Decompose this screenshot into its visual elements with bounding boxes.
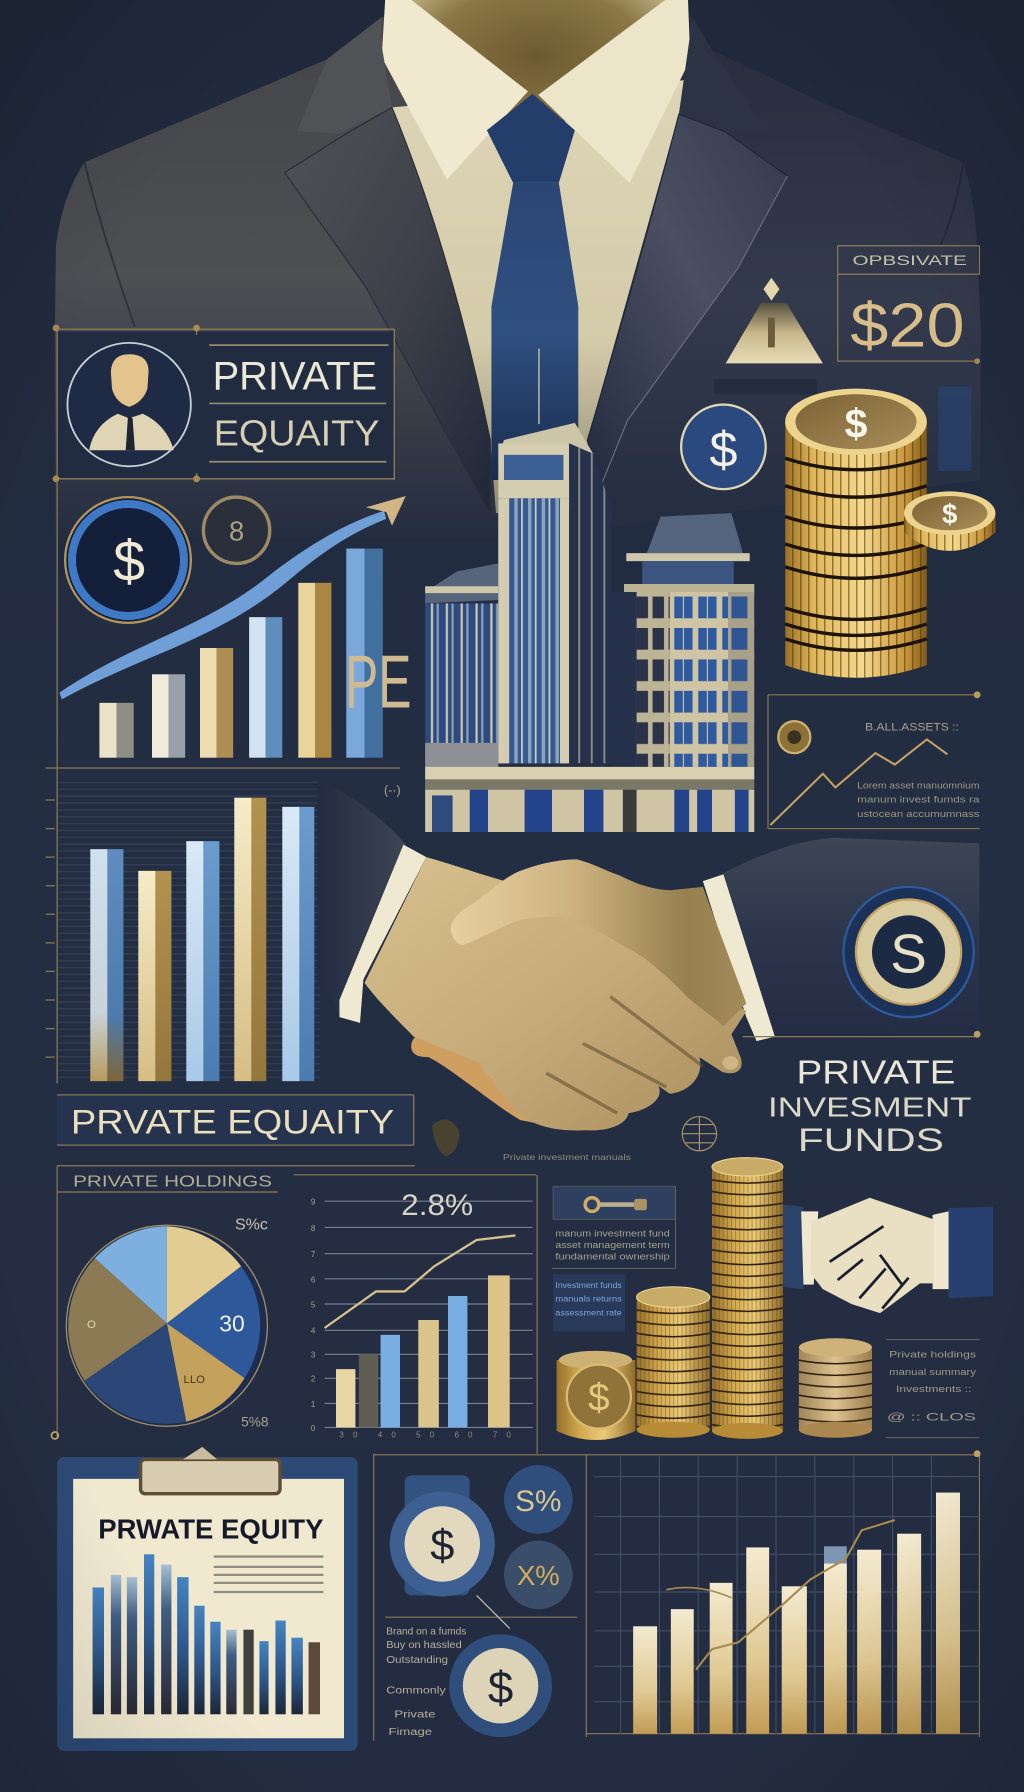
right sleeve — [723, 838, 979, 1041]
left sleeve — [318, 781, 406, 1017]
small mark: parentheses: (-·) — [384, 783, 401, 797]
panel: large bar chart — [46, 768, 320, 1083]
label: small heading: OPBSIVATE — [853, 253, 967, 268]
text rows — [555, 1229, 670, 1261]
text lines — [214, 1557, 323, 1592]
icon: blue dollar medallion: $ — [113, 530, 145, 594]
small caption: Private investment manuals — [503, 1153, 631, 1162]
label: lower wedge: LLO — [184, 1374, 205, 1386]
coin: dollar — [557, 1351, 635, 1440]
suit jacket right — [537, 17, 981, 537]
value: $20: $20 — [850, 291, 965, 360]
label: PE: PE — [345, 639, 411, 723]
icon: dollar dial — [449, 1634, 552, 1737]
icon: person in circle — [67, 343, 191, 466]
y axis labels — [311, 1198, 316, 1433]
line and bar chart: 2.8% — [294, 1175, 537, 1454]
icon: small handshake — [783, 1198, 993, 1313]
arrow: rising trend — [59, 496, 406, 699]
label: left wedge: O — [87, 1319, 96, 1331]
panel: large rising bar chart — [586, 1450, 981, 1737]
icon: triangle — [726, 278, 823, 363]
icon: blue document — [938, 386, 971, 471]
label: private holdings: PRIVATE HOLDINGS — [73, 1173, 272, 1190]
heading: private: PRIVATE — [213, 355, 377, 399]
icon: x badge: X% — [517, 1560, 560, 1591]
panel: private investment funds — [743, 1031, 981, 1158]
y axis labels: 6 — [311, 1275, 316, 1284]
notes: Commonly — [386, 1686, 447, 1697]
heading: equaity: EQUAITY — [214, 413, 379, 454]
bar chart: growth bars — [99, 549, 383, 758]
y axis labels: 8 — [311, 1224, 316, 1233]
icon: dollar circle — [681, 405, 766, 489]
bar chart — [93, 1554, 320, 1714]
panel: $20 value — [838, 246, 980, 364]
notes: ustocean accumumnass — [857, 809, 980, 819]
panel: private equity header — [53, 325, 394, 482]
label: small title: B.ALL.ASSETS :: — [865, 721, 959, 733]
thumbnail — [722, 1056, 738, 1070]
y axis labels: 9 — [311, 1198, 316, 1207]
bars — [336, 1275, 510, 1427]
label: 2.8%: 2.8% — [401, 1189, 473, 1222]
shirt collar — [382, 0, 690, 183]
lower thumb and fingertips — [411, 1031, 566, 1129]
text rows: manum investment fund — [555, 1229, 670, 1239]
label: bottom right: 5%8 — [241, 1414, 269, 1429]
panel: right side notes: manual summary — [889, 1367, 977, 1377]
icon: x badge — [504, 1541, 573, 1609]
heading line: private: PRIVATE — [797, 1054, 955, 1091]
left cuff — [339, 845, 426, 1023]
figure: suit and tie — [55, 0, 981, 537]
stack: short — [799, 1338, 872, 1438]
small ornament: coin pile — [432, 1119, 459, 1157]
coin: top — [785, 389, 927, 467]
icon: watch — [390, 1475, 495, 1597]
right cuff — [703, 874, 775, 1041]
icon: blue dollar medallion — [65, 497, 191, 623]
banner: private equity: PRVATE EQUAITY — [71, 1104, 394, 1142]
line chart — [770, 739, 947, 825]
panel: blue text rows — [553, 1274, 625, 1331]
coin stack: large — [785, 389, 995, 678]
notes: Buy on hassled — [386, 1640, 462, 1651]
icon: watch: $ — [430, 1522, 454, 1570]
coin: small — [904, 491, 995, 551]
stack: tall — [712, 1158, 783, 1439]
icon: small ring — [203, 497, 270, 563]
right lapel — [679, 17, 767, 131]
stack: medium — [637, 1287, 710, 1438]
panel: growth chart with arrow — [46, 480, 411, 768]
clip — [141, 1447, 280, 1494]
handshake — [318, 781, 979, 1130]
label: 30: 30 — [219, 1310, 245, 1336]
panel: line chart notes — [768, 691, 981, 829]
icon: percent badge: S% — [515, 1485, 561, 1518]
panel: right side notes: Investments :: — [896, 1384, 971, 1394]
panel: right side notes: Private holdings — [889, 1350, 977, 1360]
notes: Brand on a fumds — [386, 1626, 466, 1637]
pie chart — [66, 1217, 269, 1429]
panel: blue text rows: Investment funds — [555, 1281, 622, 1290]
label: top right: S%c — [235, 1217, 268, 1234]
left wing — [425, 563, 498, 768]
coin: small: $ — [942, 498, 957, 529]
y axis labels: 0 — [311, 1424, 316, 1433]
icon: small ring: 8 — [229, 516, 244, 547]
y axis labels: 7 — [311, 1250, 316, 1259]
notes — [857, 781, 981, 819]
finger creases — [546, 997, 703, 1113]
panel: clipboard report — [57, 1447, 358, 1751]
coin: top: $ — [845, 401, 868, 447]
icon: dollar circle: $ — [709, 420, 737, 477]
suit jacket left — [55, 17, 537, 537]
panel: right side notes — [886, 1339, 979, 1438]
main tower — [498, 349, 611, 763]
trend line — [696, 1520, 895, 1670]
icon: key — [585, 1198, 647, 1211]
panel: dollar icons — [374, 1454, 979, 1741]
right tower — [611, 513, 754, 767]
badge: S seal: S — [890, 923, 927, 985]
tie — [487, 94, 578, 480]
bars — [633, 1493, 960, 1734]
left lapel — [297, 17, 392, 134]
text rows: fundamental ownership — [555, 1251, 670, 1261]
clasped hand — [365, 857, 746, 1130]
icon: percent badge — [504, 1465, 573, 1534]
notes: Fimage — [389, 1727, 432, 1738]
shirt — [392, 80, 686, 513]
text rows: asset management term — [555, 1240, 670, 1250]
label: private holdings — [51, 1166, 278, 1439]
panel: right side notes: @ :: CLOS — [887, 1412, 977, 1424]
icon: coin — [778, 721, 810, 753]
y axis labels: 4 — [311, 1327, 316, 1336]
coin: dollar: $ — [588, 1376, 610, 1419]
notes: manum invest fumds ra — [857, 794, 981, 804]
notes: Outstanding — [386, 1655, 448, 1666]
panel: key notes — [552, 1186, 675, 1269]
bars — [90, 798, 314, 1081]
banner: private equity — [57, 1095, 415, 1166]
notes — [386, 1626, 466, 1738]
base with columns — [425, 767, 754, 832]
trend line — [325, 1235, 515, 1328]
notes: Lorem asset manuomnium — [857, 781, 979, 791]
paper — [73, 1479, 344, 1738]
small ornament: globe — [682, 1117, 717, 1151]
heading line: invesment: INVESMENT — [768, 1092, 972, 1123]
heading line: funds: FUNDS — [798, 1122, 944, 1158]
building: headquarters — [425, 349, 754, 832]
y axis labels: 3 — [311, 1351, 316, 1360]
heading: PRWATE EQUITY — [98, 1513, 323, 1544]
icon: dollar dial: $ — [488, 1662, 513, 1713]
panel: blue text rows: manuals returns — [555, 1295, 622, 1304]
y axis labels: 5 — [311, 1300, 316, 1309]
coin stacks: bottom — [557, 1158, 872, 1440]
axis labels: 30 40 50 60 70 — [339, 1431, 511, 1440]
upper hand and thumb — [451, 859, 746, 1026]
notes: Private — [394, 1710, 436, 1721]
badge: S seal — [843, 887, 974, 1017]
panel: blue text rows: assessment rate — [555, 1308, 622, 1317]
neck — [409, 0, 665, 160]
y axis labels: 2 — [311, 1375, 316, 1384]
y axis labels: 1 — [311, 1400, 316, 1409]
